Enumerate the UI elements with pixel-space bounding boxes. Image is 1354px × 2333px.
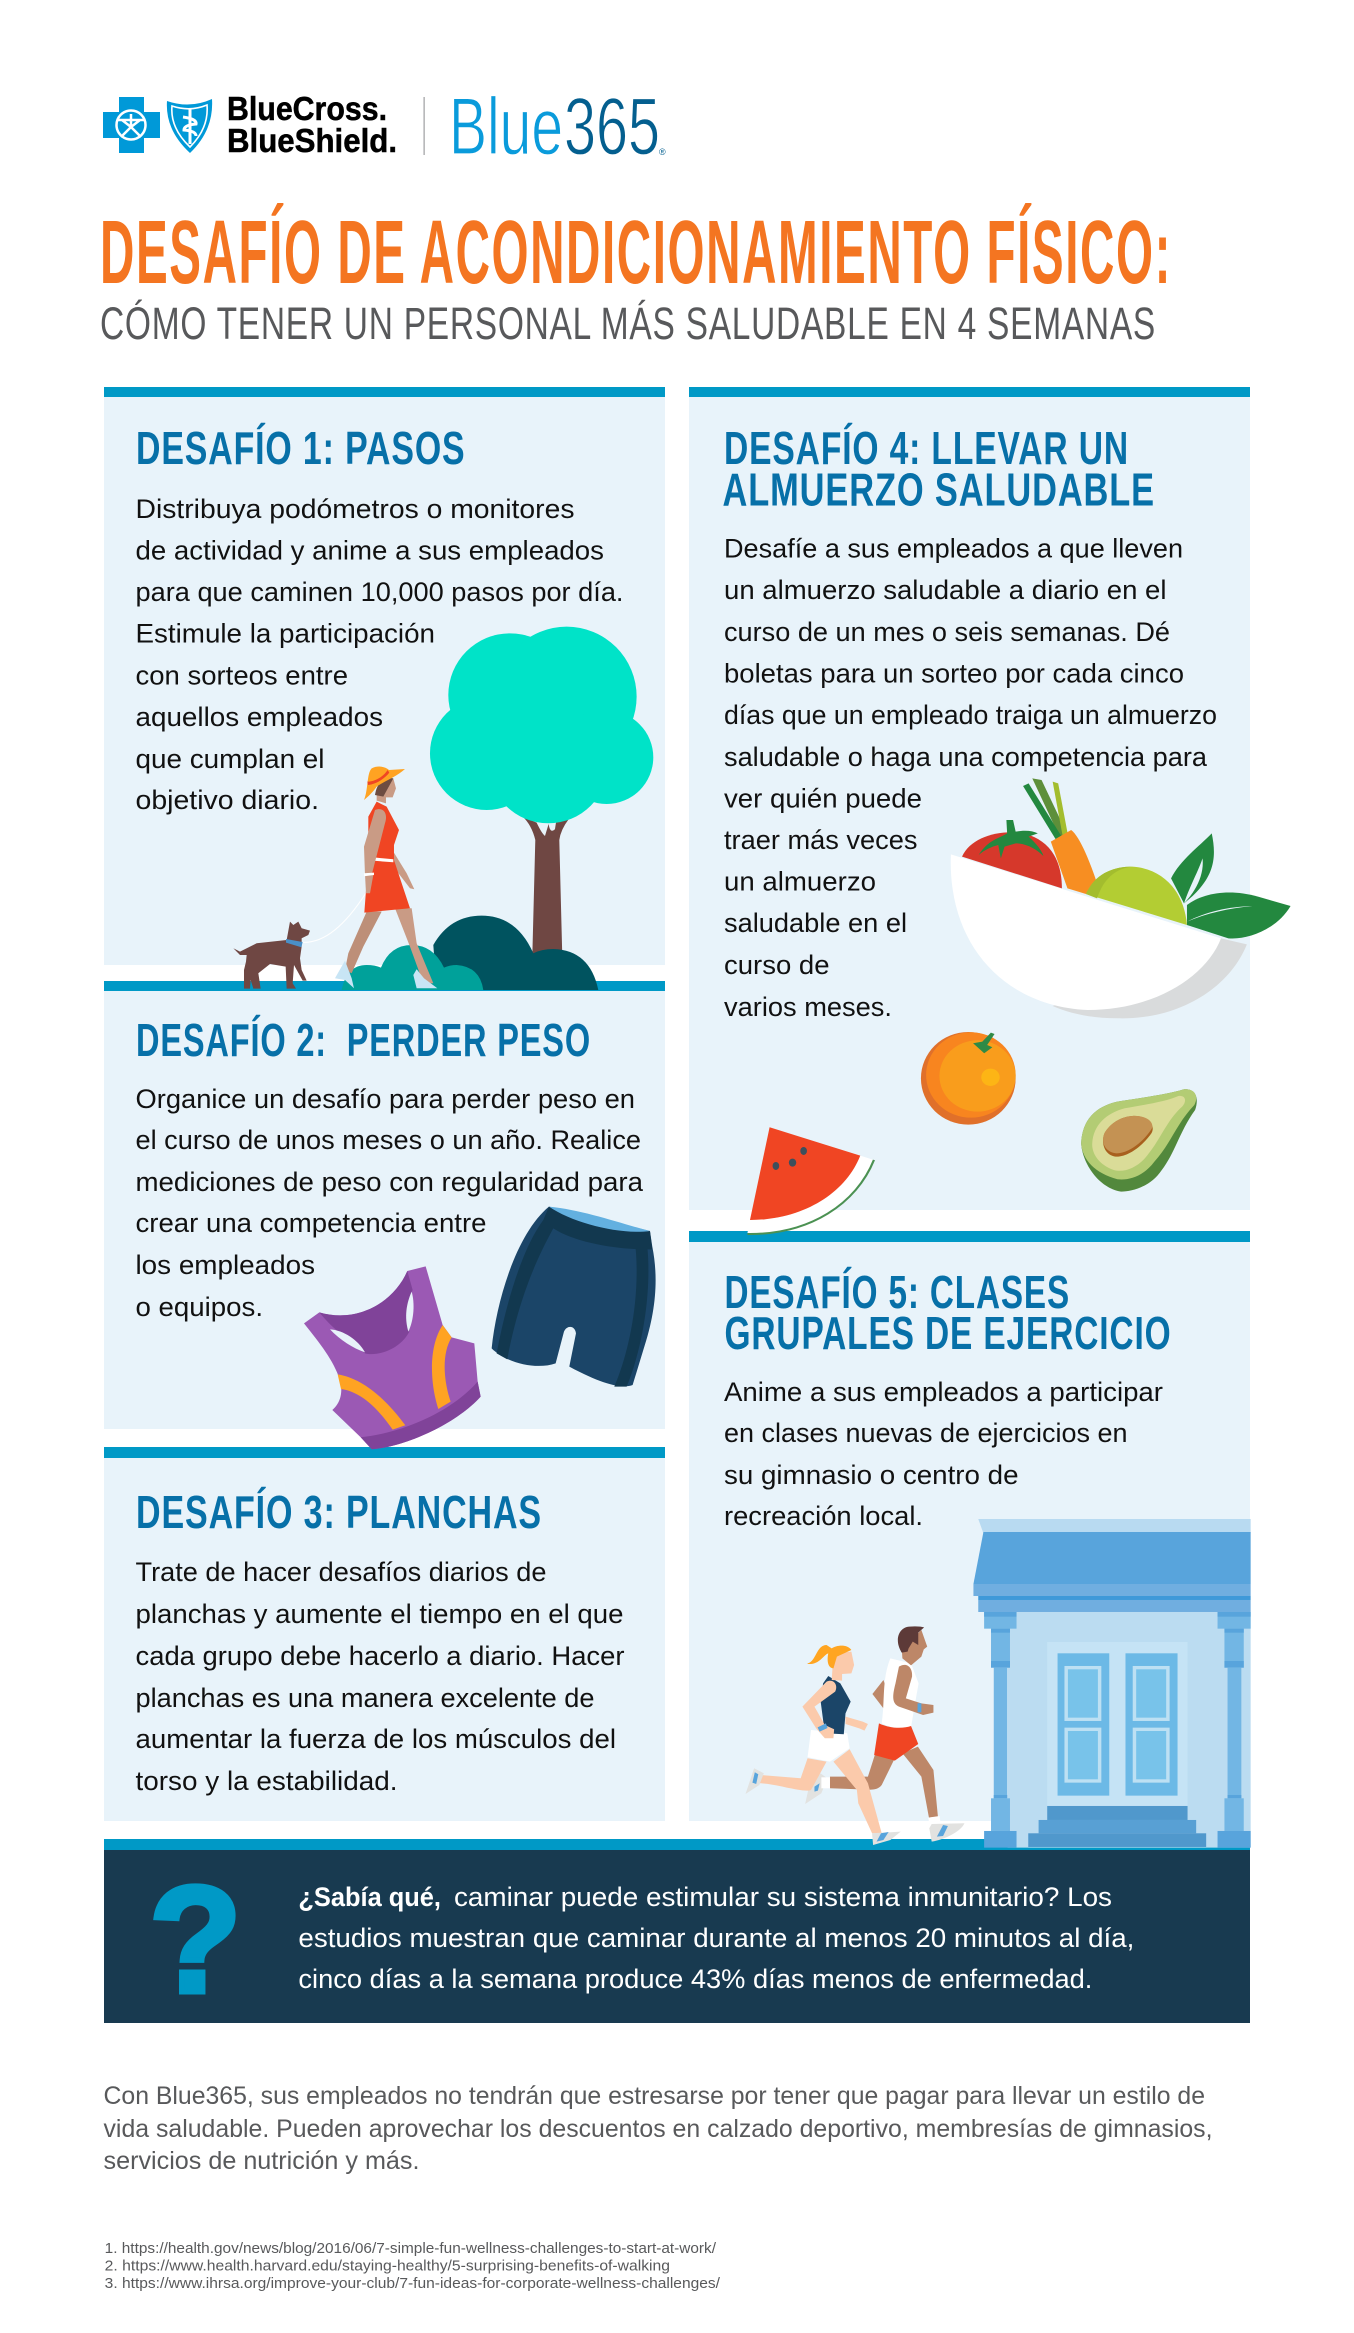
closing paragraph: [104, 2082, 1212, 2175]
heading: challenge 5: GRUPALES DE EJERCICIO: [724, 1307, 1172, 1359]
panel: challenge 1 steps: [104, 387, 665, 990]
panel: challenge 5 group classes: [689, 1231, 1251, 1848]
body text: challenge 2: [136, 1084, 643, 1322]
body text: challenge 4: días que un empleado traiga un almuerzo: [724, 700, 1217, 730]
body text: challenge 4: [724, 534, 1217, 1022]
icon: salad bowl: [951, 778, 1291, 1018]
BlueCross BlueShield wordmark: [227, 90, 397, 159]
body text: challenge 1: [136, 494, 624, 815]
callout text: caminar puede estimular su sistema inmunitario? Los: [454, 1882, 1112, 1912]
icon: sports bra: [304, 1266, 481, 1449]
body text: challenge 2: o equipos.: [136, 1292, 263, 1322]
icon: watermelon slice: [747, 1127, 874, 1234]
icon: woman running: [746, 1645, 901, 1845]
body text: challenge 4: curso de un mes o seis semanas. Dé: [724, 617, 1170, 647]
body text: challenge 4: saludable en el: [724, 908, 907, 938]
heading: challenge 5: [724, 1266, 1172, 1359]
icon: avocado: [1081, 1089, 1197, 1192]
left column: [984, 1612, 1017, 1848]
body text: challenge 4: Desafíe a sus empleados a que lleven: [724, 534, 1183, 564]
body text: challenge 5: su gimnasio o centro de: [724, 1460, 1018, 1490]
body text: challenge 1: de actividad y anime a sus empleados: [136, 536, 604, 566]
body text: challenge 2: los empleados: [136, 1250, 315, 1280]
body text: challenge 3: Trate de hacer desafíos diarios de: [136, 1557, 546, 1587]
body text: challenge 1: para que caminen 10,000 pasos por día.: [136, 577, 624, 607]
body text: challenge 1: aquellos empleados: [136, 702, 383, 732]
body text: challenge 2: el curso de unos meses o un año. Realice: [136, 1125, 641, 1155]
icon: gym building: [973, 1519, 1251, 1848]
body text: challenge 2: crear una competencia entre: [136, 1208, 486, 1238]
body text: challenge 1: Estimule la participación: [136, 618, 435, 648]
closing paragraph: Con Blue365, sus empleados no tendrán que estresarse por tener que pagar para llevar un estilo de: [104, 2082, 1205, 2110]
body text: challenge 3: cada grupo debe hacerlo a diario. Hacer: [136, 1641, 625, 1671]
panel: challenge 2 lose weight: [104, 981, 665, 1449]
icon: blue shield: [167, 99, 212, 153]
steps: [1028, 1806, 1206, 1847]
panel: challenge 4 healthy lunch: [689, 387, 1291, 1234]
heading: challenge 3: DESAFÍO 3: PLANCHAS: [136, 1486, 542, 1538]
BlueCross BlueShield wordmark: BlueShield.: [227, 122, 397, 159]
Blue365 wordmark: ®: [659, 147, 666, 157]
body text: challenge 5: [724, 1377, 1163, 1531]
heading: challenge 5: DESAFÍO 5: CLASES: [724, 1266, 1070, 1318]
BlueCross BlueShield wordmark: BlueCross.: [227, 90, 387, 127]
callout text: ¿Sabía qué,: [298, 1882, 441, 1912]
closing paragraph: servicios de nutrición y más.: [104, 2147, 420, 2175]
double doors: [1047, 1642, 1188, 1807]
body text: challenge 3: [136, 1557, 625, 1796]
heading: challenge 1: DESAFÍO 1: PASOS: [136, 422, 466, 474]
icon: blue cross: [103, 97, 160, 153]
body text: challenge 1: objetivo diario.: [136, 785, 319, 815]
Blue365 wordmark: Blue: [449, 82, 563, 172]
icon: running shorts: [492, 1207, 656, 1387]
body text: challenge 3: torso y la estabilidad.: [136, 1766, 398, 1796]
references: 3. https://www.ihrsa.org/improve-your-club/7-fun-ideas-for-corporate-wellness-challenges/: [105, 2276, 721, 2292]
body text: challenge 4: varios meses.: [724, 992, 892, 1022]
callout: did you know: [104, 1839, 1250, 2025]
body text: challenge 5: Anime a sus empleados a participar: [724, 1377, 1163, 1407]
body text: challenge 5: recreación local.: [724, 1501, 923, 1531]
body text: challenge 2: mediciones de peso con regularidad para: [136, 1167, 643, 1197]
heading: challenge 4: ALMUERZO SALUDABLE: [722, 464, 1155, 516]
body text: challenge 4: un almuerzo saludable a diario en el: [724, 575, 1166, 605]
body text: challenge 1: con sorteos entre: [136, 660, 348, 690]
body text: challenge 3: aumentar la fuerza de los músculos del: [136, 1724, 616, 1754]
body text: challenge 5: en clases nuevas de ejercicios en: [724, 1418, 1128, 1448]
body text: challenge 4: saludable o haga una competencia para: [724, 742, 1207, 772]
body text: challenge 4: curso de: [724, 950, 830, 980]
references: 2. https://www.health.harvard.edu/staying-healthy/5-surprising-benefits-of-walking: [105, 2259, 670, 2275]
references: 1. https://health.gov/news/blog/2016/06/7-simple-fun-wellness-challenges-to-start-at-work/: [105, 2241, 717, 2257]
icon: question mark: ?: [149, 1855, 242, 2025]
icon: man running: [805, 1626, 964, 1842]
right column: [1218, 1612, 1251, 1848]
icon: tree and bushes: [342, 627, 653, 990]
callout text: estudios muestran que caminar durante al menos 20 minutos al día,: [298, 1923, 1134, 1953]
Blue365 wordmark: 365: [564, 82, 660, 172]
callout text: [298, 1882, 1134, 1994]
heading: challenge 2: DESAFÍO 2: PERDER PESO: [136, 1014, 591, 1066]
header logos: [103, 82, 666, 172]
body text: challenge 4: ver quién puede: [724, 784, 922, 814]
body text: challenge 4: boletas para un sorteo por cada cinco: [724, 658, 1184, 688]
body text: challenge 2: Organice un desafío para perder peso en: [136, 1084, 635, 1114]
heading: challenge 4: DESAFÍO 4: LLEVAR UN: [724, 422, 1129, 474]
body text: challenge 1: Distribuya podómetros o monitores: [136, 494, 574, 524]
closing paragraph: vida saludable. Pueden aprovechar los descuentos en calzado deportivo, membresías de gimnasios,: [104, 2115, 1212, 2143]
heading: challenge 4: [722, 422, 1155, 516]
body text: challenge 3: planchas y aumente el tiempo en el que: [136, 1599, 624, 1629]
panel: challenge 3 planks: [104, 1447, 665, 1821]
body text: challenge 4: traer más veces: [724, 825, 918, 855]
callout text: cinco días a la semana produce 43% días menos de enfermedad.: [298, 1964, 1092, 1994]
icon: woman walking dog: [233, 766, 437, 989]
icon: orange: [921, 1032, 1016, 1125]
body text: challenge 3: planchas es una manera excelente de: [136, 1683, 594, 1713]
references: [105, 2241, 721, 2292]
body text: challenge 1: que cumplan el: [136, 744, 324, 774]
body text: challenge 4: un almuerzo: [724, 866, 876, 896]
